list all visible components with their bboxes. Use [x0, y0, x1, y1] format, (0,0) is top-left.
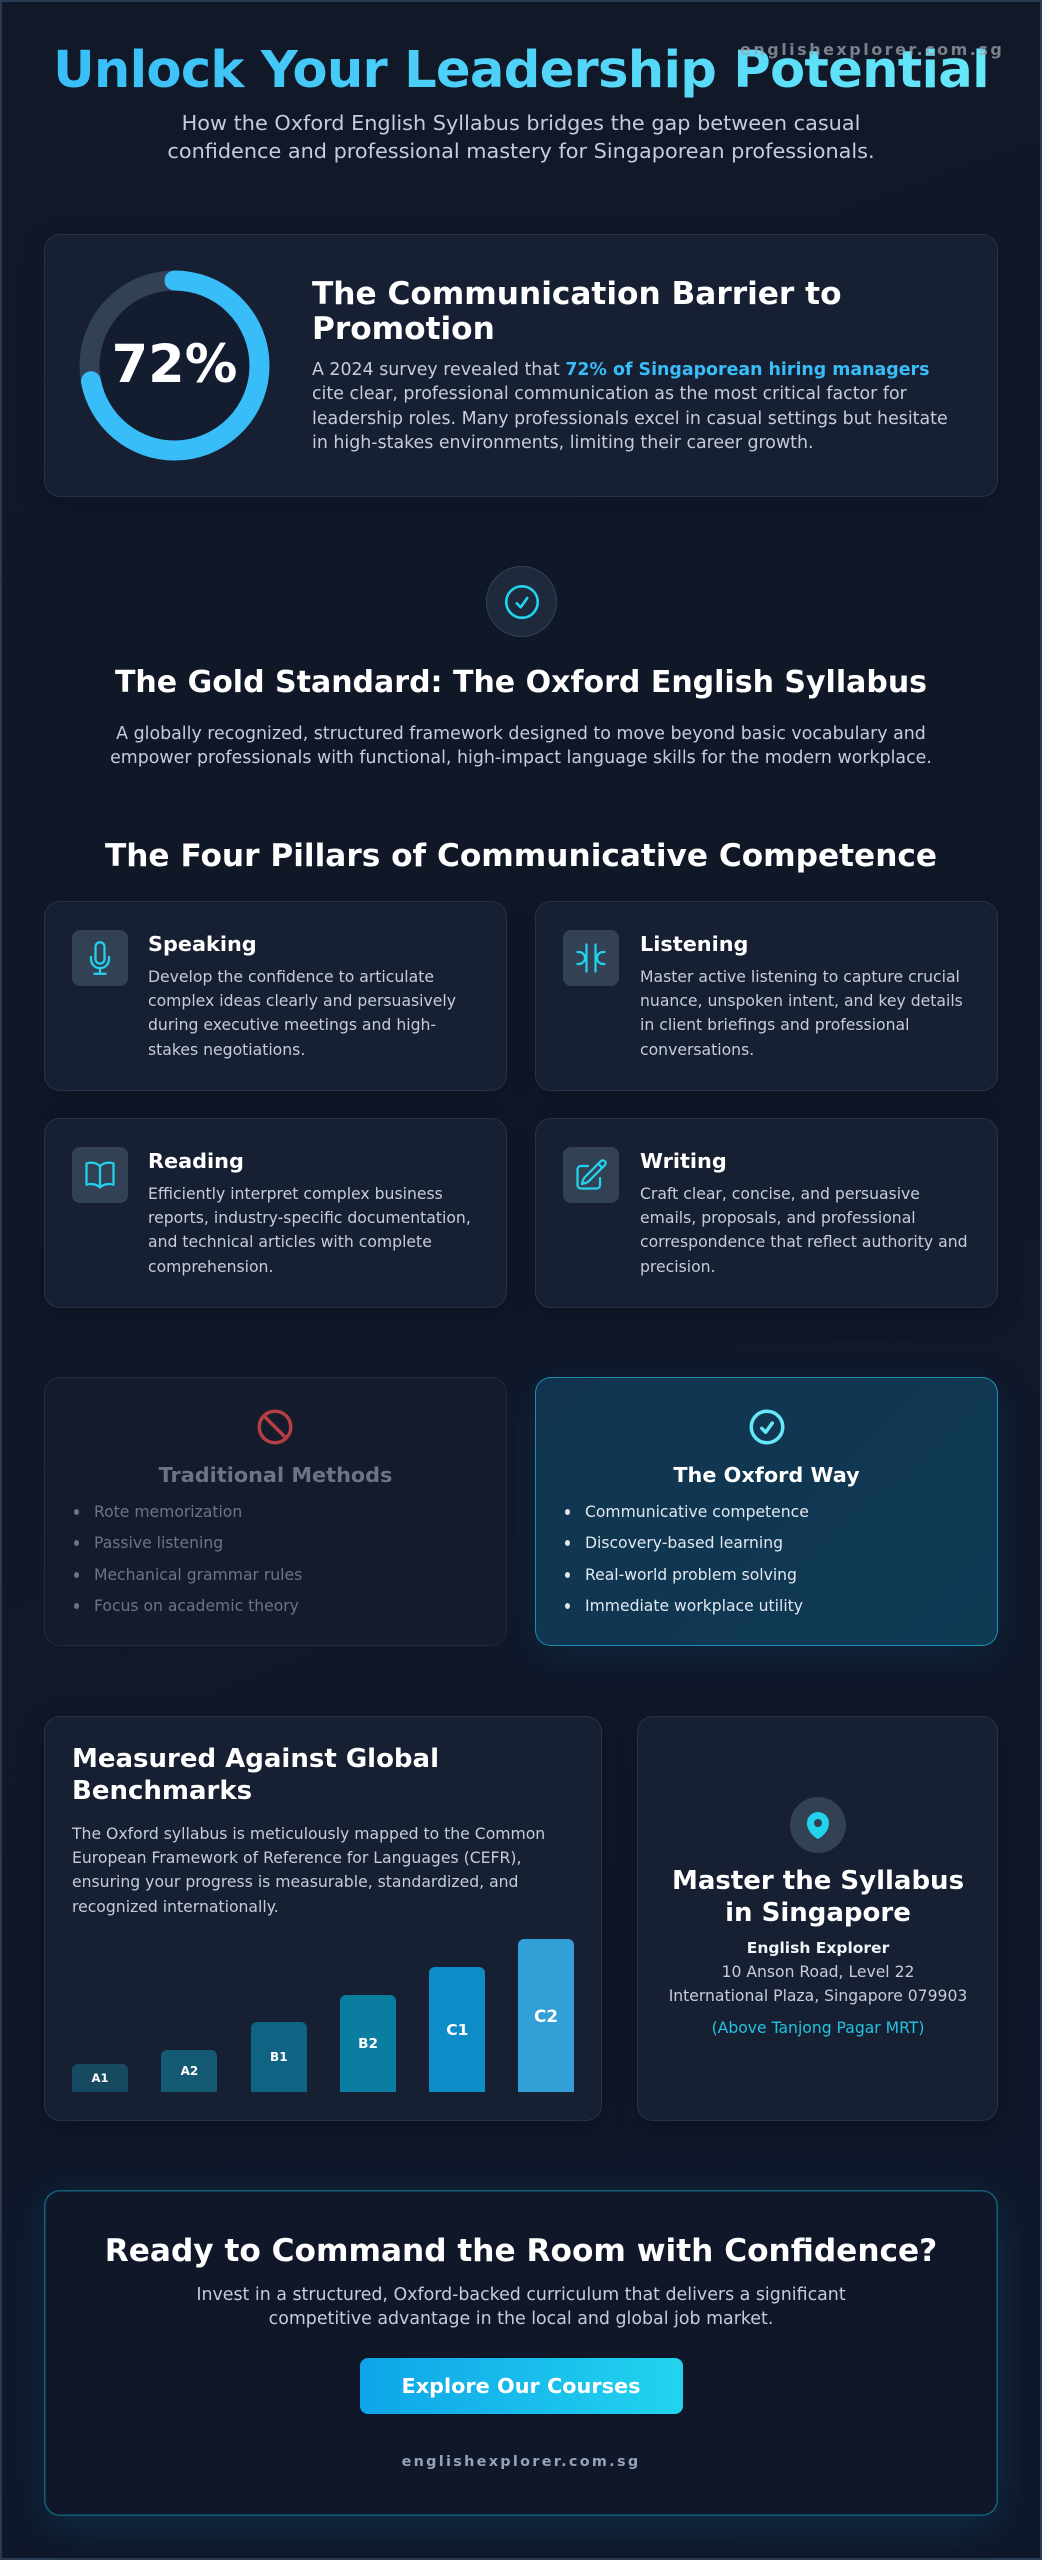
icon: microphone	[72, 930, 128, 986]
heading: Writing	[640, 1149, 727, 1173]
bullet list: Rote memorization	[94, 1503, 242, 1521]
body text: A 2024 survey revealed that 72% of Singaporean hiring managers	[312, 360, 929, 380]
icon: gold standard check	[486, 566, 557, 637]
panel: writing	[535, 1118, 998, 1308]
gold standard description: empower professionals with functional, high-impact language skills for the modern workplace.	[110, 748, 932, 768]
heading	[672, 1866, 964, 1928]
donut chart 72%	[80, 270, 270, 460]
description: reports, industry-specific documentation,	[148, 1208, 471, 1227]
watermark url: englishexplorer.com.sg	[740, 40, 1004, 59]
bar B1	[251, 2022, 307, 2092]
heading	[312, 276, 842, 347]
button: explore courses	[360, 2358, 682, 2414]
bar A2	[161, 2050, 217, 2092]
panel: the oxford way	[535, 1377, 998, 1646]
description	[640, 1184, 968, 1276]
description	[148, 966, 456, 1059]
bar C2	[518, 1939, 574, 2092]
subtitle: confidence and professional mastery for Singaporean professionals.	[167, 139, 875, 163]
bullet list: Passive listening	[94, 1534, 223, 1552]
panel: location	[637, 1716, 998, 2121]
bar chart: CEFR levels	[72, 1939, 574, 2092]
organisation name: English Explorer	[747, 1939, 889, 1957]
bullet list: Immediate workplace utility	[585, 1597, 803, 1615]
panel: call to action	[44, 2190, 998, 2516]
description: competitive advantage in the local and global job market.	[269, 2309, 773, 2329]
heading: Listening	[640, 932, 748, 956]
panel: communication barrier	[44, 234, 998, 497]
panel: listening	[535, 901, 998, 1091]
description: during executive meetings and high-	[148, 1015, 436, 1034]
heading: Traditional Methods	[159, 1463, 392, 1487]
description: Invest in a structured, Oxford-backed curriculum that delivers a significant	[196, 2285, 846, 2305]
heading: Ready to Command the Room with Confidence?	[105, 2233, 937, 2269]
panel: traditional methods	[44, 1377, 507, 1646]
icon: map pin	[790, 1797, 846, 1853]
body text: in high-stakes environments, limiting their career growth.	[312, 433, 814, 453]
heading: Master the Syllabus	[672, 1866, 964, 1896]
description: nuance, unspoken intent, and key details	[640, 991, 963, 1010]
address: International Plaza, Singapore 079903	[669, 1987, 967, 2005]
heading: The Communication Barrier to	[312, 276, 842, 312]
description: in client briefings and professional	[640, 1015, 909, 1034]
bullet list: Real-world problem solving	[585, 1566, 797, 1584]
gold standard description	[110, 724, 932, 768]
heading	[72, 1744, 439, 1806]
heading: Measured Against Global	[72, 1744, 439, 1774]
subtitle: How the Oxford English Syllabus bridges the gap between casual	[182, 111, 860, 135]
bar B2: B2	[358, 2036, 378, 2052]
description: recognized internationally.	[72, 1897, 279, 1916]
description: Efficiently interpret complex business	[148, 1184, 443, 1202]
bullet list	[565, 1503, 809, 1615]
heading: The Oxford Way	[673, 1463, 860, 1487]
description: ensuring your progress is measurable, standardized, and	[72, 1872, 518, 1891]
address	[669, 1963, 967, 2005]
description: stakes negotiations.	[148, 1040, 305, 1059]
description	[72, 1824, 545, 1916]
gold standard description: A globally recognized, structured framework designed to move beyond basic vocabulary and	[116, 724, 926, 744]
bar C1	[429, 1967, 485, 2092]
description	[640, 966, 963, 1059]
icon: open book	[72, 1147, 128, 1203]
bar C1: C1	[446, 2020, 468, 2038]
heading: Speaking	[148, 932, 257, 956]
panel: speaking	[44, 901, 507, 1091]
description: complex ideas clearly and persuasively	[148, 991, 456, 1010]
description: The Oxford syllabus is meticulously mapped to the Common	[72, 1824, 545, 1842]
body text	[312, 360, 948, 453]
heading: four pillars: The Four Pillars of Communicative Competence	[105, 838, 937, 874]
bar A1	[72, 2064, 128, 2092]
heading: in Singapore	[725, 1898, 911, 1928]
bar A1: A1	[92, 2071, 108, 2085]
bar A2: A2	[181, 2064, 198, 2078]
bullet list: Focus on academic theory	[94, 1597, 299, 1615]
description	[148, 1184, 471, 1276]
address: 10 Anson Road, Level 22	[722, 1963, 914, 1981]
footer url: englishexplorer.com.sg	[402, 2454, 640, 2470]
heading: gold standard: The Gold Standard: The Oxford English Syllabus	[115, 665, 927, 700]
bullet list	[74, 1503, 302, 1615]
title: Unlock Your Leadership Potential	[53, 40, 989, 100]
panel: reading	[44, 1118, 507, 1308]
panel: global benchmarks	[44, 1716, 602, 2121]
icon: check circle	[750, 1410, 784, 1444]
body text: cite clear, professional communication as the most critical factor for	[312, 384, 907, 404]
heading: Benchmarks	[72, 1776, 252, 1806]
body text: leadership roles. Many professionals excel in casual settings but hesitate	[312, 409, 948, 429]
description: and technical articles with complete	[148, 1232, 432, 1251]
transit note: (Above Tanjong Pagar MRT)	[712, 2019, 924, 2037]
icon: pencil	[563, 1147, 619, 1203]
bullet list: Mechanical grammar rules	[94, 1566, 302, 1584]
description: comprehension.	[148, 1257, 273, 1276]
icon: prohibited	[258, 1410, 292, 1444]
button: explore courses: Explore Our Courses	[402, 2374, 640, 2398]
bar B2	[340, 1995, 396, 2092]
description	[196, 2285, 846, 2329]
description: European Framework of Reference for Languages (CEFR),	[72, 1848, 521, 1867]
description: Craft clear, concise, and persuasive	[640, 1184, 920, 1202]
icon: listening	[563, 930, 619, 986]
bullet list: Discovery-based learning	[585, 1534, 783, 1552]
heading: Reading	[148, 1149, 244, 1173]
description: Develop the confidence to articulate	[148, 966, 434, 986]
description: emails, proposals, and professional	[640, 1208, 916, 1227]
bullet list: Communicative competence	[585, 1503, 809, 1521]
description: Master active listening to capture crucial	[640, 966, 960, 986]
bar C2: C2	[534, 2006, 558, 2026]
description: correspondence that reflect authority and	[640, 1232, 968, 1251]
subtitle	[167, 111, 875, 163]
heading: Promotion	[312, 311, 495, 347]
description: conversations.	[640, 1040, 754, 1059]
donut chart 72%: 72%	[112, 334, 237, 395]
bar B1: B1	[270, 2050, 288, 2064]
description: precision.	[640, 1257, 716, 1276]
